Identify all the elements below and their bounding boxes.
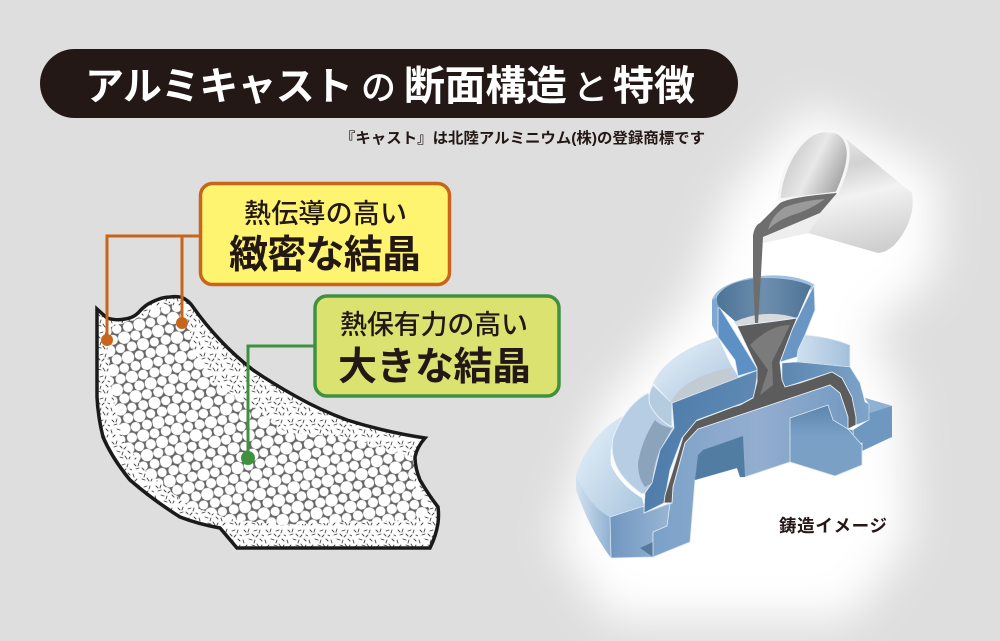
leader line: large crystal: [241, 346, 314, 465]
metal sprue highlight: [750, 325, 790, 395]
title banner: 断面構造: [404, 63, 567, 109]
left outer wall side: [576, 475, 611, 558]
core recess left: [695, 436, 745, 480]
left top step surface: [653, 337, 738, 403]
callout: large crystal: [315, 296, 559, 396]
title banner: 特徴: [613, 63, 695, 109]
cross-section diagram: [97, 297, 438, 548]
title banner: と: [573, 69, 608, 108]
callout: dense crystal: 熱伝導の高い: [244, 199, 407, 229]
melt surface: [734, 314, 797, 332]
title banner: [40, 49, 738, 118]
right flange: [853, 398, 892, 451]
caption: casting image: 鋳造イメージ: [779, 516, 887, 536]
callout: dense crystal: [200, 184, 450, 284]
trademark note: 『キャスト』は北陸アルミニウム(株)の登録商標です: [340, 129, 705, 147]
left middle step window: [638, 420, 672, 487]
core recess right wall: [790, 405, 862, 476]
funnel left wall cut: [718, 308, 758, 376]
left middle step: [612, 393, 674, 494]
callout: dense crystal: 緻密な結晶: [229, 234, 421, 277]
callout: large crystal: 熱保有力の高い: [340, 310, 528, 340]
lower mould centre face: [653, 385, 862, 557]
back right step of mould: [797, 335, 850, 367]
molten metal in mould: [664, 318, 856, 503]
left top step grey window: [670, 368, 737, 403]
large crystal region: [107, 303, 430, 525]
white glow behind casting illustration: [555, 105, 940, 620]
lower mould, left block: [610, 504, 670, 558]
funnel bowl interior: [717, 278, 811, 323]
title banner: アルミキャスト: [85, 66, 353, 109]
left outer wall top surface: [576, 415, 644, 517]
lower mould foot: [640, 542, 653, 557]
section outline with fine crystal texture: [97, 297, 438, 548]
funnel right wall cut: [780, 285, 815, 362]
upper mould, left face: [644, 370, 758, 513]
casting illustration: [576, 131, 913, 558]
ladle: [763, 131, 913, 253]
stream highlight: [768, 199, 825, 230]
funnel bowl rim: [712, 275, 815, 300]
metal stream: [753, 193, 837, 323]
left top step side: [649, 385, 672, 427]
upper mould, right face: [782, 362, 869, 425]
leader lines: dense crystal: [101, 236, 200, 346]
funnel outer strip: [712, 298, 720, 337]
callout: large crystal: 大きな結晶: [338, 346, 531, 389]
title banner: の: [361, 69, 396, 108]
